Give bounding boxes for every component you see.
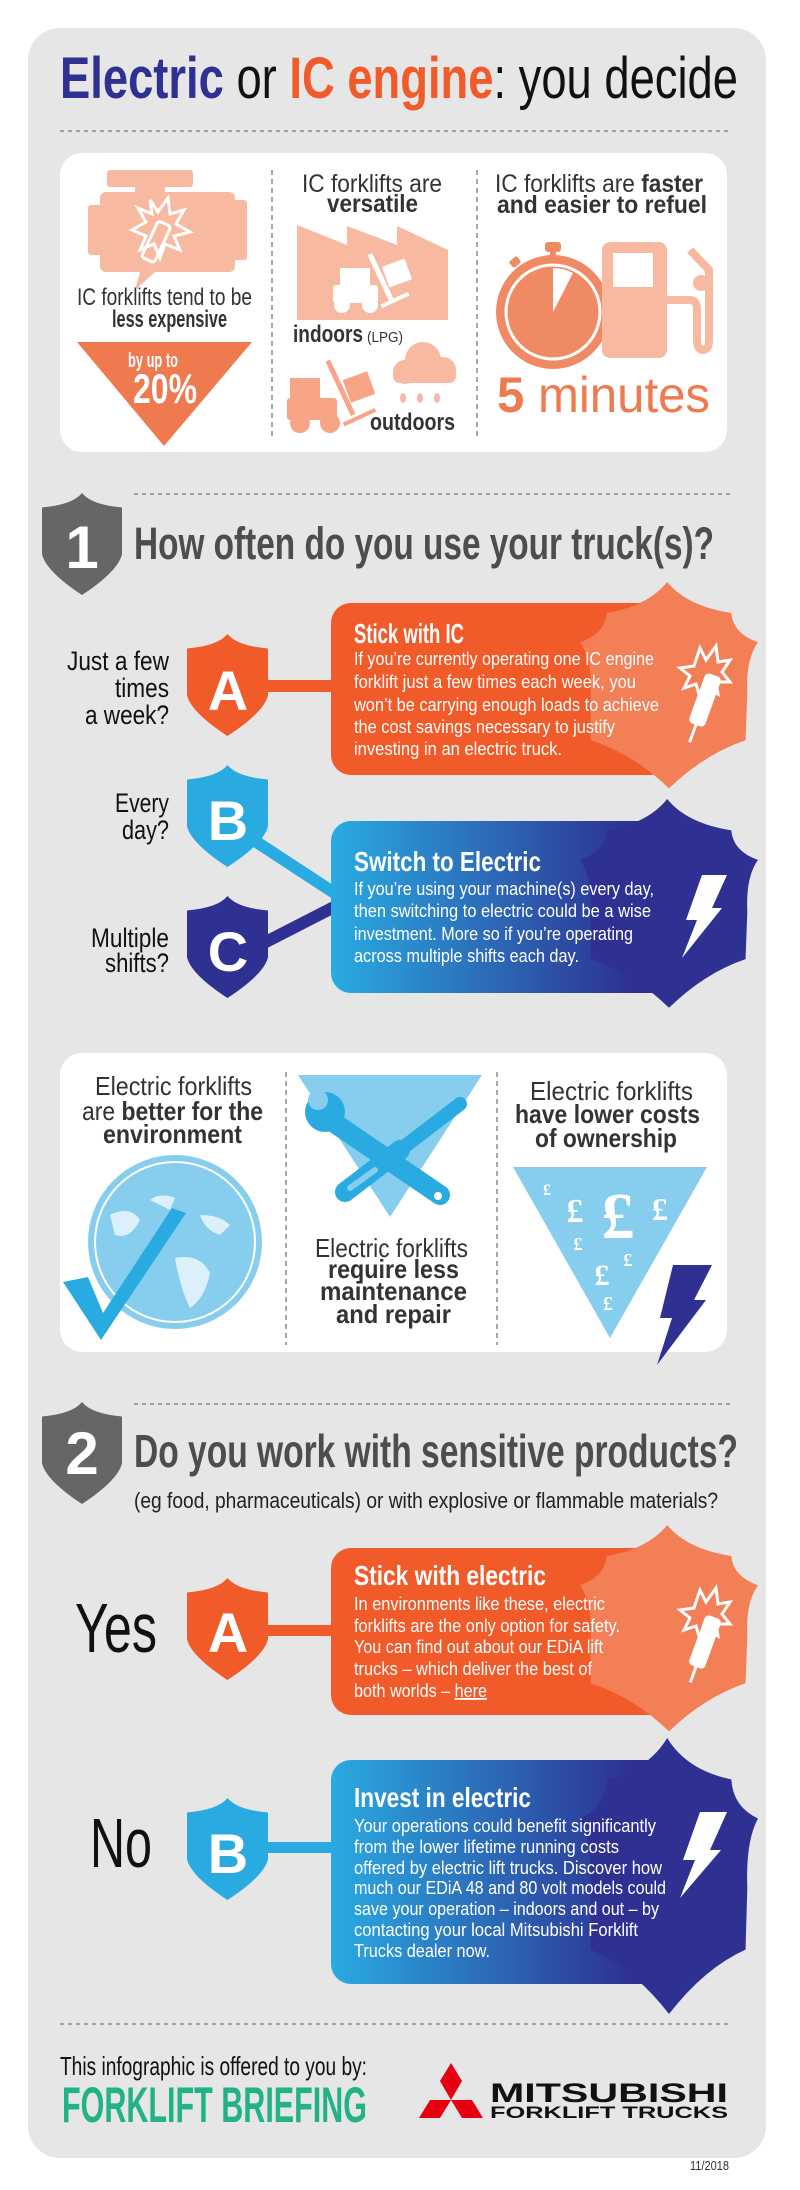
logo: mitsubishi forklift trucks: MITSUBISHI (490, 2078, 728, 2108)
text: 5 minutes: 5 minutes (497, 367, 710, 423)
text: lower costs: have lower costs (515, 1099, 700, 1129)
panel: stick with IC: If you’re currently operating one IC engine (354, 649, 654, 669)
icon: shield A2: A (208, 1601, 248, 1664)
text: less expensive: IC forklifts tend to be (77, 284, 252, 311)
connector no (262, 1842, 334, 1853)
panel: stick with electric (331, 1525, 758, 1731)
panel: stick with electric: You can find out about our EDiA lift (354, 1637, 603, 1657)
panel: electric advantages card (60, 1053, 727, 1352)
panel: switch to electric: investment. More so if you’re operating (354, 924, 633, 944)
connector yes (262, 1625, 334, 1636)
icon: pound triangle: £ (652, 1191, 668, 1227)
panel: switch to electric: If you’re using your machine(s) every day, (354, 879, 654, 899)
text: less maintenance: maintenance (320, 1276, 467, 1306)
label: no: No (90, 1804, 152, 1882)
icon: lightning (682, 875, 727, 958)
footer text: offered by: This infographic is offered to you by: (60, 2051, 367, 2081)
label: multiple shifts (91, 923, 169, 978)
text: less maintenance: Electric forklifts (315, 1233, 468, 1263)
panel: invest in electric: save your operation – indoors and out – by (354, 1899, 659, 1919)
icon: fuel pump (602, 242, 709, 358)
logo: forklift briefing: FORKLIFT BRIEFING (62, 2077, 367, 2133)
panel: invest in electric: contacting your local Mitsubishi Forklift (354, 1920, 638, 1940)
label: just a few times a week: times (115, 673, 169, 703)
panel: stick with electric: Stick with electric (354, 1560, 546, 1591)
icon: shield B: B (208, 789, 248, 852)
callout: by up to 20% (77, 342, 252, 446)
logo: mitsubishi forklift trucks (419, 2063, 728, 2122)
icon: stopwatch (496, 242, 610, 369)
icon: spark plug 2 (680, 1588, 730, 1685)
icon: pound triangle: £ (624, 1250, 632, 1270)
connector B (255, 841, 336, 894)
text: less maintenance (315, 1233, 468, 1329)
panel: stick with IC: forklift just a few times each week, you (354, 672, 636, 692)
icon: shield B (187, 765, 268, 867)
panel: stick with IC (331, 582, 758, 788)
text: lower costs: Electric forklifts (530, 1076, 693, 1106)
panel: stick with IC: investing in an electric truck. (354, 739, 562, 759)
icon: shield 2: 2 (65, 1420, 99, 1487)
panel: stick with electric: forklifts are the only option for safety. (354, 1616, 620, 1636)
label: every day: day? (122, 815, 169, 845)
panel: invest in electric: Trucks dealer now. (354, 1941, 490, 1961)
text: faster to refuel: and easier to refuel (497, 191, 707, 219)
panel: stick with electric: In environments like these, electric (354, 1594, 605, 1614)
panel: stick with IC: Stick with IC (354, 618, 464, 649)
label: just a few times a week: Just a few (67, 646, 169, 676)
icon: pound triangle: £ (594, 1259, 610, 1292)
icon: pound triangle: £ (602, 1180, 634, 1253)
icon: pound triangle (513, 1167, 707, 1338)
panel: invest in electric: offered by electric lift trucks. Discover how (354, 1858, 663, 1878)
text: better for environment: Electric forklifts (95, 1071, 252, 1101)
panel: invest in electric (331, 1738, 758, 2014)
icon: shield B2 (187, 1798, 268, 1900)
icon: navy lightning (657, 1265, 712, 1365)
icon: shield C: C (208, 920, 248, 983)
panel: invest in electric: Invest in electric (354, 1782, 531, 1813)
callout: by up to 20%: by up to (128, 350, 178, 372)
icon: shield A: A (208, 659, 248, 722)
text: better for environment: environment (103, 1119, 242, 1149)
panel: stick with IC: won’t be carrying enough loads to achieve (353, 695, 659, 715)
icon: spark plug (680, 646, 730, 745)
text: indoors: (LPG) (367, 329, 403, 346)
text: faster to refuel: IC forklifts are faster (495, 170, 703, 198)
icon: pound triangle: £ (566, 1193, 584, 1230)
text: better for environment: are better for the (82, 1096, 263, 1126)
panel: stick with electric: both worlds – here (354, 1681, 487, 1701)
text: less expensive: less expensive (112, 306, 227, 333)
label: yes: Yes (75, 1589, 157, 1667)
icon: shield B2: B (208, 1822, 248, 1885)
label: multiple shifts: Multiple (91, 923, 169, 953)
icon: shield 1: 1 (65, 514, 99, 581)
text: faster to refuel (495, 170, 707, 219)
icon: factory with forklift (297, 225, 448, 320)
subheading 2: (eg food, pharmaceuticals) or with explosive or flammable materials? (134, 1488, 718, 1513)
icon: shield A2 (187, 1578, 268, 1680)
icon: shield 2 (42, 1402, 122, 1504)
icon: engine (88, 170, 247, 290)
icon: globe with tick (63, 1155, 262, 1340)
panel: invest in electric: from the lower lifetime running costs (354, 1837, 619, 1857)
icon: shield 1 (42, 493, 122, 595)
connector C (258, 906, 336, 946)
label: every day: Every (115, 788, 169, 818)
icon: shield C (187, 896, 268, 998)
icon: wrench and screwdriver (298, 1075, 482, 1217)
panel: stick with IC: the cost savings necessary to justify (354, 717, 615, 737)
icon: pound triangle: £ (543, 1182, 551, 1199)
text: versatile: versatile (327, 190, 418, 218)
text: indoors: indoors (293, 321, 363, 348)
panel: switch to electric: Switch to Electric (354, 846, 541, 877)
text: less maintenance: and repair (336, 1299, 451, 1329)
panel: switch to electric (331, 799, 758, 1008)
text: better for environment (82, 1071, 263, 1149)
panel: stick with electric: trucks – which deliver the best of (354, 1659, 593, 1679)
panel: switch to electric: then switching to electric could be a wise (354, 901, 651, 921)
text: less maintenance: require less (328, 1254, 459, 1284)
panel: IC advantages card (60, 153, 727, 452)
icon: shield A (187, 634, 268, 736)
connector A (262, 680, 334, 692)
text: less expensive (77, 284, 252, 333)
label: just a few times a week: a week? (85, 700, 169, 730)
icon: pound triangle: £ (603, 1293, 613, 1315)
icon: pound triangle: £ (574, 1234, 582, 1254)
icon: lightning 2 (680, 1812, 727, 1898)
title: Electric or IC engine: you decide (60, 46, 738, 111)
text: lower costs: of ownership (535, 1123, 677, 1153)
label: every day (115, 788, 169, 845)
label: just a few times a week (67, 646, 169, 730)
panel: switch to electric: across multiple shifts each day. (354, 946, 579, 966)
panel: invest in electric: much our EDiA 48 and 80 volt models could (354, 1878, 666, 1898)
label: multiple shifts: shifts? (105, 948, 169, 978)
icon: rain cloud (393, 342, 456, 403)
panel: invest in electric: Your operations could benefit significantly (354, 1816, 656, 1836)
text: outdoors: outdoors (370, 409, 455, 436)
icon: outdoor forklift (287, 360, 376, 433)
text: versatile (302, 170, 442, 218)
text: versatile: IC forklifts are (302, 170, 442, 198)
logo: mitsubishi forklift trucks: FORKLIFT TRUCKS (490, 2103, 728, 2122)
date: 11/2018 (690, 2158, 729, 2173)
callout: by up to 20%: 20% (133, 365, 197, 412)
text: lower costs (515, 1076, 700, 1153)
